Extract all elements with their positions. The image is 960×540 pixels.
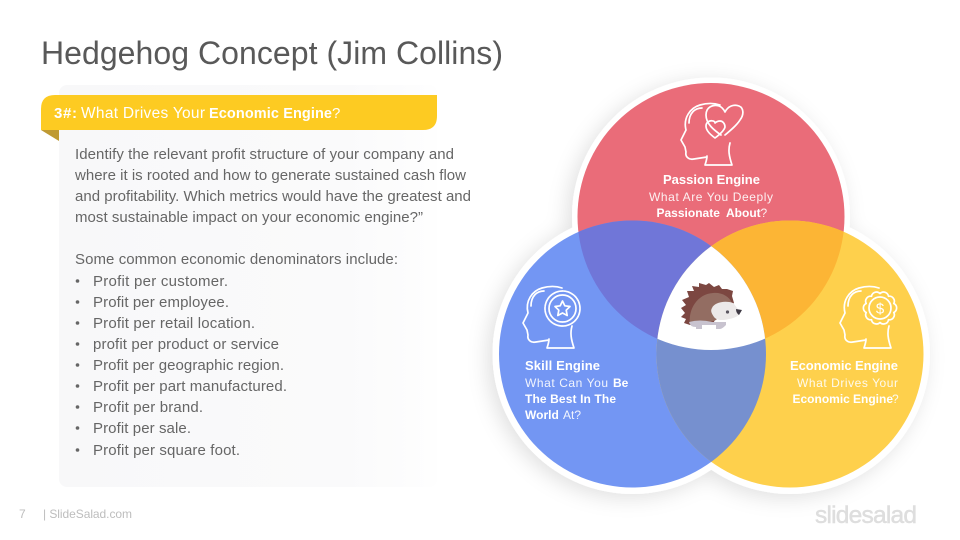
label: passion engine: What Are You Deeply	[649, 190, 773, 204]
intro paragraph: and profitability. Which metrics would have the greatest and	[75, 188, 471, 205]
icon: hedgehog	[681, 283, 742, 329]
label: skill engine	[525, 358, 629, 422]
ribbon heading: ?	[332, 105, 340, 122]
ribbon heading: Economic Engine	[209, 106, 332, 122]
intro paragraph	[74, 146, 471, 226]
panel: skill engine	[523, 286, 629, 422]
label: passion engine	[649, 172, 773, 220]
bullet list: Profit per employee.	[93, 294, 229, 311]
label: passion engine: Passion Engine	[663, 172, 760, 187]
panel background	[59, 85, 437, 487]
icon: head with heart	[681, 104, 743, 165]
panel: economic engine	[790, 286, 899, 406]
bullet list: Profit per retail location.	[93, 315, 255, 332]
bullet list	[76, 273, 287, 459]
list intro: Some common economic denominators include:	[75, 251, 398, 268]
label: skill engine: World	[525, 408, 559, 422]
panel: passion engine	[649, 104, 773, 220]
label: passion engine: About	[726, 206, 761, 220]
ribbon heading	[41, 95, 437, 130]
bullet list: Profit per geographic region.	[93, 357, 284, 374]
title: Hedgehog Concept (Jim Collins)	[41, 35, 503, 71]
label: passion engine: Passionate	[656, 206, 720, 220]
label: economic engine: Economic Engine	[790, 358, 898, 373]
centre white region	[658, 246, 766, 350]
label: passion engine: ?	[760, 206, 768, 220]
venn diagram	[492, 78, 930, 494]
white outer rings	[492, 78, 930, 494]
panel: economic engine text	[41, 85, 471, 487]
intro paragraph: most sustainable impact on your economic engine?”	[75, 209, 423, 226]
bullet list: Profit per sale.	[93, 420, 191, 437]
label: skill engine: What Can You	[525, 376, 608, 390]
circle: skill	[499, 220, 766, 488]
label: skill engine: At?	[563, 408, 581, 422]
label: skill engine: Skill Engine	[525, 358, 600, 373]
intro paragraph: Identify the relevant profit structure of your company and	[75, 146, 454, 163]
overlap: skill and economic	[656, 246, 766, 462]
circle: passion	[578, 83, 844, 350]
icon: dollar sign: $	[876, 300, 885, 318]
label: skill engine: The Best In The	[525, 392, 616, 406]
label: economic engine: What Drives Your	[797, 376, 898, 390]
bullet list: Profit per square foot.	[93, 442, 240, 459]
label: economic engine: Economic	[792, 392, 850, 406]
circle: economic	[656, 220, 924, 488]
ribbon heading: 3#:	[54, 105, 77, 122]
icon: head with star badge	[523, 286, 580, 348]
intro paragraph: where it is rooted and how to generate sustained cash flow	[74, 167, 466, 184]
bullet list: Profit per brand.	[93, 399, 203, 416]
overlap: passion and skill	[578, 220, 712, 339]
bullet list: Profit per part manufactured.	[93, 378, 287, 395]
overlap: passion and economic	[657, 220, 844, 339]
label: economic engine	[790, 358, 899, 406]
page number: 7	[19, 507, 26, 521]
footer site name: | SlideSalad.com	[43, 507, 132, 521]
label: skill engine: Be	[613, 376, 629, 390]
bullet list: Profit per customer.	[93, 273, 228, 290]
label: economic engine: Engine	[853, 392, 893, 406]
bullet list: profit per product or service	[93, 336, 279, 353]
ribbon fold	[41, 130, 59, 141]
icon: head with dollar gear	[840, 286, 897, 348]
ribbon heading: What Drives Your	[81, 105, 205, 122]
label: economic engine: ?	[892, 392, 899, 406]
logo: slidesalad	[815, 502, 917, 529]
